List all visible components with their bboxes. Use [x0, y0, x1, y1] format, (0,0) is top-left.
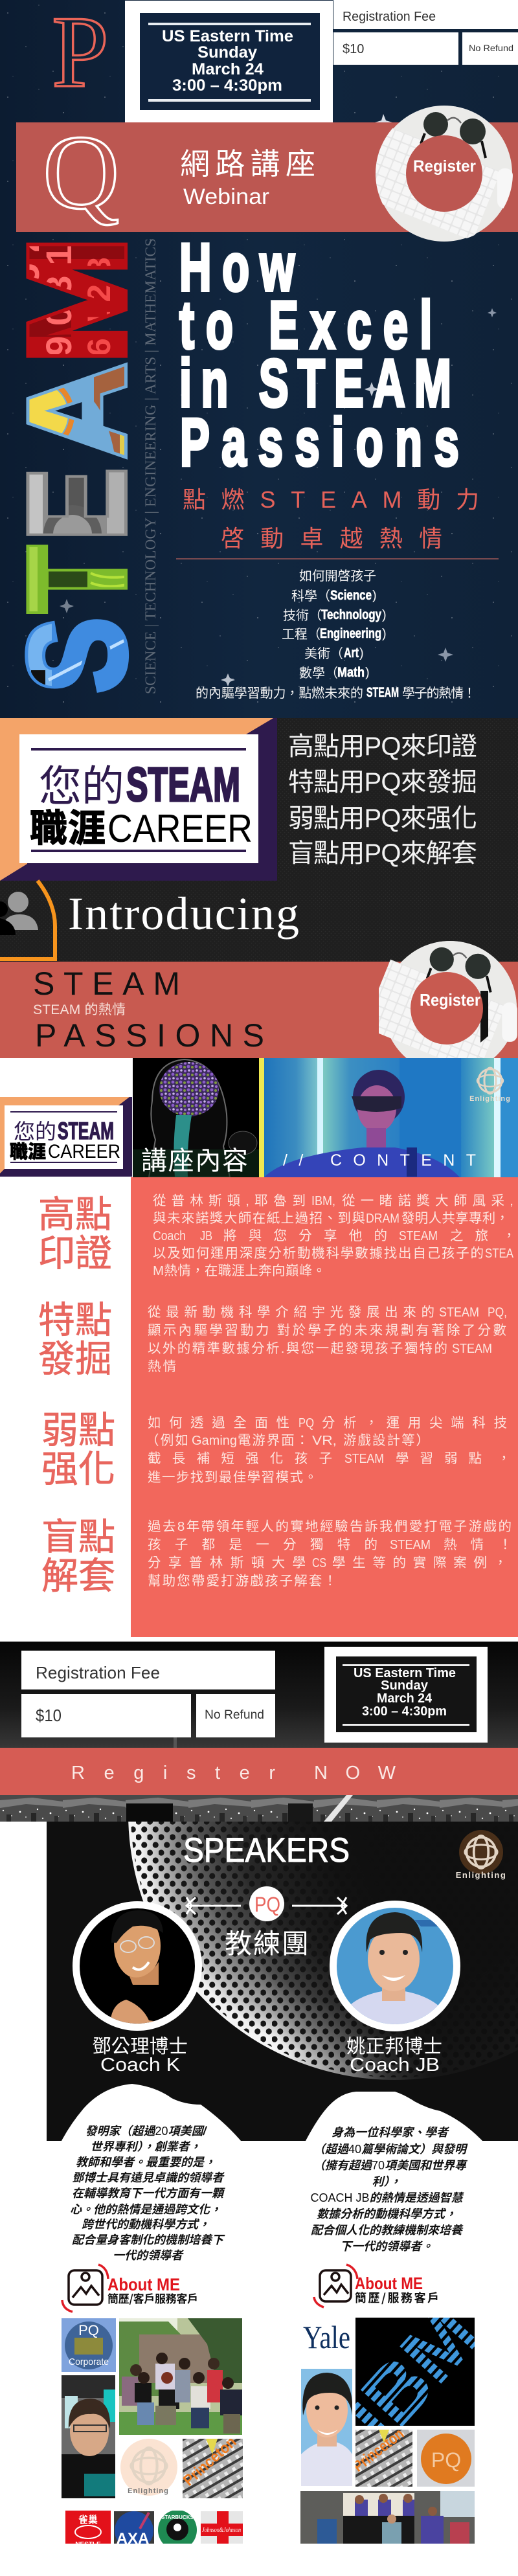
- letter T with circuit board: [26, 545, 128, 614]
- graphic: vertical STEAM letters: [25, 242, 130, 693]
- badge: your STEAM career: 職涯: [30, 798, 106, 852]
- text block: STEAM list: STEAM: [366, 685, 399, 700]
- text: unique point paragraph: 以外的精準數據分析.與您一起發現孩子獨特的: [148, 1341, 447, 1356]
- text block: STEAM list: Math: [337, 665, 365, 680]
- panel: event time box: US Eastern Time: [162, 27, 293, 45]
- text: unique point paragraph: 顯示內驅學習動力 對於學子的未來規劃有著除了分數: [148, 1323, 506, 1338]
- shape: left bio blob: [62, 2084, 241, 2141]
- text: high point paragraph: 耶魯到: [254, 1193, 306, 1208]
- panel: registration fee table 2: Registration Fee: [36, 1663, 160, 1682]
- heading: coach team: 教練團: [225, 1922, 309, 1961]
- icon: PQ circle: [249, 1886, 284, 1921]
- button: register circle 2: [379, 941, 517, 1058]
- badge: your STEAM career: CAREER: [107, 807, 253, 850]
- image: PQ Corporate: PQ: [78, 2322, 99, 2338]
- panel: speakers: [47, 1822, 518, 2141]
- text: high point paragraph: 發明人共享專利，: [401, 1211, 509, 1226]
- heading: SPEAKERS: SPEAKERS: [183, 1831, 350, 1870]
- text: weak point paragraph: （例如: [146, 1433, 188, 1448]
- text: high point paragraph: 之旅: [450, 1228, 488, 1243]
- icon: Enlighting logo: [469, 1068, 511, 1103]
- text: vertical discipline line: SCIENCE | TECHNOLOGY | ENGINEERING | ARTS | MATHEMATICS: [142, 238, 159, 694]
- title: How to Excel in STEAM Passions: Passions: [180, 404, 471, 480]
- image: Princeton map 2: Princeton: [350, 2425, 407, 2476]
- text: high point paragraph: Coach: [153, 1228, 186, 1243]
- text block: STEAM list: Science: [330, 588, 372, 603]
- text block: STEAM list: ): [382, 627, 387, 641]
- text block: four PQ points: 高點用PQ來印證: [288, 732, 477, 761]
- image: PQ Corporate: Corporate: [69, 2356, 109, 2367]
- badge: small STEAM career: 您的: [14, 1114, 56, 1146]
- text: Coach JB bio: 數據分析的動機科學方式，: [317, 2208, 456, 2220]
- logo: Nestle: NESTLE: [75, 2541, 101, 2548]
- heading: Introducing: Introducing: [68, 888, 299, 940]
- photo: Coach JB: [330, 1901, 460, 2031]
- logo: AXA: [114, 2511, 154, 2544]
- panel: registration fee table 2: No Refund: [205, 1708, 264, 1722]
- badge: your STEAM career: STEAM: [126, 758, 240, 811]
- letter A with clock art: A: [0, 363, 154, 458]
- text: Coach K bio: 發明家（超過20項美國/: [85, 2125, 208, 2138]
- text: weak point paragraph: Gaming: [192, 1433, 237, 1448]
- heading: About ME left: About ME: [107, 2275, 180, 2294]
- text: weak point paragraph: VR,: [312, 1433, 337, 1448]
- text block: STEAM list: 科學（: [291, 585, 330, 604]
- text: Coach JB bio: 身為一位科學家、學者: [332, 2126, 449, 2139]
- panel: registration fee table 2: [21, 1651, 275, 1737]
- image: team meeting: [300, 2491, 475, 2544]
- text block: STEAM list: 數學（: [299, 662, 338, 681]
- text: unique point paragraph: 從最新動機科學介紹宇光發展出來的: [148, 1305, 434, 1320]
- divider line: [176, 558, 499, 559]
- text block: STEAM list: ): [372, 589, 377, 603]
- panel: STEAM passions band: PASSIONS: [35, 1017, 264, 1054]
- text: Coach K bio: [70, 2125, 225, 2262]
- text: Coach K name: Coach K: [100, 2055, 181, 2075]
- text: weak point paragraph: 學習弱點: [396, 1451, 482, 1466]
- image: Enlighting logo panel: [120, 2439, 177, 2496]
- text: Coach K bio: 心。他的熱情是通過跨文化，: [70, 2203, 221, 2216]
- letter A with clock art: [26, 362, 128, 460]
- panel: event time box 2: US Eastern Time: [354, 1666, 456, 1680]
- text block: STEAM list: [196, 565, 476, 701]
- heading: weak point: 弱點: [41, 1401, 115, 1454]
- text: Coach K name: [92, 2031, 188, 2075]
- heading: About ME right: About ME: [355, 2274, 423, 2293]
- image: man with glasses: [62, 2375, 115, 2498]
- heading: About ME right: 簡歷/服務客戶: [355, 2289, 439, 2306]
- text: blind point paragraph: 學生等的實際案例，: [332, 1555, 507, 1570]
- text block: STEAM list: Technology: [321, 607, 381, 622]
- image: IBM logo: [355, 2318, 475, 2426]
- heading: CONTENT: // CONTENT: [283, 1151, 476, 1169]
- title: How to Excel in STEAM Passions: in STEAM: [179, 345, 460, 421]
- text block: four PQ points: 盲點用PQ來解套: [288, 839, 477, 868]
- heading: unique point: 特點: [38, 1291, 112, 1344]
- text: Coach JB name: [346, 2031, 442, 2075]
- panel: event time box 2: Sunday: [381, 1678, 429, 1693]
- text: blind point paragraph: [148, 1519, 512, 1588]
- subtitle: ignite passion: 啓動卓越熱情: [221, 525, 442, 552]
- badge: small STEAM career: CAREER: [48, 1141, 120, 1162]
- heading: high point: [38, 1185, 112, 1277]
- letter M with red numbers: 5 2 3: [4, 199, 47, 285]
- heading: blind point: 解套: [41, 1546, 115, 1599]
- text: unique point paragraph: PQ,: [488, 1305, 507, 1320]
- logo: Nestle: 雀巢: [78, 2513, 98, 2526]
- band: Register NOW: [0, 1748, 518, 1795]
- panel: registration fee table: $10: [343, 42, 364, 56]
- heading: blind point: [41, 1508, 115, 1599]
- text block: STEAM list: Engineering: [320, 626, 381, 641]
- text: weak point paragraph: STEAM: [344, 1451, 384, 1466]
- text: blind point paragraph: 分享普林斯頓大學: [148, 1555, 306, 1570]
- text block: STEAM list: 如何開啓孩子: [299, 565, 376, 584]
- text: Coach JB name: 姚正邦博士: [346, 2031, 442, 2059]
- text: weak point paragraph: 電游界面：: [238, 1433, 309, 1448]
- text: Coach JB bio: COACH JB的熱情是透過智慧: [310, 2191, 465, 2204]
- badge: your STEAM career: [0, 718, 277, 881]
- text: high point paragraph: ，: [502, 1228, 515, 1243]
- title: How to Excel in STEAM Passions: to Excel: [179, 287, 444, 363]
- text: Coach JB bio: 配合個人化的教練機制來培養: [311, 2224, 464, 2237]
- image: PQ orange: [417, 2430, 475, 2487]
- letter S with blue lab glass: S: [1, 617, 154, 693]
- text block: four PQ points: 特點用PQ來發掘: [288, 768, 477, 797]
- logo: Starbucks: [158, 2511, 197, 2544]
- icon: Enlighting logo: [456, 1830, 506, 1880]
- text: weak point paragraph: 進一步找到最佳學習模式。: [148, 1470, 317, 1485]
- text: high point paragraph: STEAM: [399, 1228, 438, 1243]
- text: Coach JB bio: （擁有超過70項美國和世界專: [313, 2159, 468, 2172]
- text: unique point paragraph: STEAM: [452, 1341, 492, 1356]
- title: How to Excel in STEAM Passions: How: [179, 229, 305, 305]
- text: Coach JB bio: 利），: [372, 2175, 401, 2188]
- text: weak point paragraph: 分析，運用尖端科技: [322, 1416, 507, 1430]
- divider: yellow strip: [259, 1058, 264, 1177]
- logo: Johnson and Johnson: Johnson&Johnson: [202, 2526, 241, 2534]
- logo: Yale: Yale: [303, 2319, 350, 2355]
- heading: Q drop letter: Q: [43, 114, 119, 231]
- button: register circle 2: Register: [420, 990, 480, 1010]
- text: unique point paragraph: STEAM: [439, 1305, 479, 1320]
- text: blind point paragraph: 過去8年帶領年輕人的實地經驗告訴我們愛打電子游戲的: [148, 1519, 512, 1534]
- heading: weak point: 强化: [41, 1440, 115, 1493]
- logo: AXA: AXA: [117, 2530, 149, 2548]
- heading: About ME right: [355, 2274, 439, 2306]
- text: Coach JB bio: （超過40篇學術論文）與發明: [313, 2143, 468, 2156]
- heading: high point: 高點: [38, 1185, 112, 1238]
- icon: PQ circle: PQ: [254, 1893, 280, 1916]
- panel: webinar band: [16, 114, 518, 232]
- text: webinar Chinese: 網路講座: [180, 141, 315, 183]
- panel: dark career section: [0, 718, 518, 962]
- icon: photo frame left: [62, 2265, 108, 2312]
- heading: unique point: 發掘: [38, 1329, 112, 1383]
- button: register circle: [376, 106, 513, 242]
- text: blind point paragraph: 熱情: [444, 1537, 484, 1552]
- image: Coach JB portrait: [301, 2369, 352, 2486]
- panel: event time box 2: 3:00 – 4:30pm: [362, 1704, 447, 1719]
- panel: event time box: March 24: [192, 60, 264, 78]
- text: unique point paragraph: [148, 1305, 507, 1374]
- letter M with red numbers: 6 1 2 3: [81, 257, 117, 356]
- text block: STEAM list: ): [365, 666, 370, 680]
- panel: event time box 2: [324, 1647, 488, 1743]
- text: high point paragraph: DRAM: [366, 1211, 400, 1226]
- text: high point paragraph: 從一睹諾獎大師風采,: [342, 1193, 513, 1208]
- subtitle: ignite STEAM: 點燃STEAM動力: [183, 486, 479, 513]
- panel: event time box: 3:00 – 4:30pm: [172, 76, 282, 95]
- image: Princeton map 2: [355, 2430, 412, 2487]
- text: high point paragraph: 將與您分享他的: [223, 1228, 387, 1243]
- icon: Enlighting logo: Enlighting: [469, 1095, 511, 1103]
- image: Princeton map: Princeton: [180, 2433, 240, 2489]
- text: weak point paragraph: 如何透過全面性: [148, 1416, 289, 1430]
- letter T with circuit board: T: [0, 546, 153, 613]
- text: Coach K bio: 世界專利），創業者，: [91, 2140, 201, 2153]
- letter M with red numbers: 9 0 3 1: [38, 245, 79, 356]
- text: blind point paragraph: ！: [499, 1537, 512, 1552]
- text block: STEAM list: 技術（: [283, 605, 322, 624]
- panel: registration fee table: No Refund: [469, 43, 513, 53]
- heading: lecture content: 講座內容: [141, 1140, 248, 1177]
- icon: orange bracket with people: [0, 881, 55, 959]
- icon: Enlighting logo: Enlighting: [456, 1870, 506, 1880]
- heading: weak point: [41, 1401, 115, 1493]
- letter M with red numbers: M: [0, 236, 153, 365]
- text: Coach K bio: 配合量身客制化的機制培養下: [72, 2233, 225, 2246]
- image: PQ Corporate: [62, 2318, 116, 2372]
- text: high point paragraph: 以及如何運用深度分析動機科學數據找出自己孩子的: [153, 1246, 484, 1261]
- heading: About ME left: 簡歷/客戶服務客戶: [107, 2290, 198, 2306]
- text: high point paragraph: M熱情，在職涯上奔向巔峰。: [153, 1263, 326, 1278]
- panel: content coral background: [131, 1177, 518, 1637]
- text block: STEAM list: 的內驅學習動力，點燃未來的: [196, 683, 363, 701]
- panel: event time box: [125, 1, 333, 123]
- text block: STEAM list: 學子的熱情！: [402, 683, 476, 701]
- text: high point paragraph: JB: [200, 1228, 212, 1243]
- image: Enlighting logo panel: Enlighting: [128, 2487, 169, 2495]
- band: Register NOW: NOW: [314, 1763, 396, 1783]
- text: Coach K bio: 一代的領導者: [113, 2249, 184, 2262]
- text: high point paragraph: [153, 1193, 515, 1278]
- text block: STEAM list: ): [359, 646, 364, 661]
- panel: registration fee table: [333, 0, 518, 65]
- image: Princeton map: [183, 2439, 243, 2498]
- panel: starry hero background: [0, 0, 518, 718]
- badge: small STEAM career: 職涯: [10, 1138, 46, 1164]
- logo: Johnson and Johnson: [201, 2511, 243, 2544]
- panel: STEAM passions band: STEAM 的熱情: [33, 1002, 126, 1017]
- logo: Nestle: [65, 2511, 111, 2544]
- shape: right bio blob: [306, 2092, 482, 2141]
- text: unique point paragraph: 熱情: [148, 1359, 176, 1374]
- title: How to Excel in STEAM Passions: [179, 229, 471, 480]
- text: webinar English: Webinar: [183, 185, 269, 209]
- heading: unique point: [38, 1291, 112, 1383]
- text: high point paragraph: 從普林斯頓,: [153, 1193, 249, 1208]
- text: Coach K bio: 教師和學者。最重要的是，: [76, 2156, 216, 2169]
- image: PQ orange: PQ: [431, 2448, 461, 2472]
- text: Coach JB name: Coach JB: [350, 2055, 440, 2075]
- text: Coach K bio: 在輔導教育下一代方面有一顆: [72, 2187, 225, 2200]
- panel: event time box 2: March 24: [377, 1691, 433, 1706]
- letter E with metal gears: E: [0, 468, 153, 541]
- panel: event time box: Sunday: [197, 43, 257, 62]
- text: Coach JB bio: [310, 2126, 468, 2253]
- arrow: right: [292, 1897, 346, 1914]
- photo: Coach K: [73, 1901, 202, 2031]
- text block: STEAM list: 工程（: [282, 624, 321, 642]
- text: blind point paragraph: 孩子都是一分獨特的: [148, 1537, 377, 1552]
- text block: STEAM list: 美術（: [304, 643, 343, 662]
- text block: four PQ points: [288, 732, 477, 868]
- image: glass head brain: [133, 1058, 259, 1177]
- letter E with metal gears: [26, 469, 128, 536]
- text: high point paragraph: IBM,: [311, 1193, 335, 1208]
- panel: registration fee table 2: $10: [36, 1706, 62, 1725]
- icon: photo frame right: [314, 2265, 357, 2307]
- graphic: speaker sphere grille: [128, 1822, 429, 2080]
- button: register circle: Register: [413, 157, 476, 175]
- text: Coach K bio: 鄧博士具有遠見卓識的領導者: [72, 2171, 225, 2184]
- text: weak point paragraph: [146, 1416, 510, 1485]
- text: high point paragraph: 與未來諾獎大師在紙上過招、到與: [153, 1211, 365, 1226]
- panel: registration fee table: Registration Fee: [343, 10, 436, 24]
- text: blind point paragraph: 幫助您帶愛打游戲孩子解套！: [148, 1574, 337, 1588]
- letter S with blue lab glass: [25, 619, 130, 693]
- badge: small STEAM career: STEAM: [58, 1118, 114, 1144]
- image: VR person: [264, 1058, 518, 1177]
- panel: STEAM passions band: [0, 962, 518, 1058]
- image: client logos: [65, 2511, 243, 2544]
- text: weak point paragraph: PQ: [298, 1416, 314, 1430]
- text: blind point paragraph: STEAM: [390, 1537, 431, 1552]
- heading: blind point: 盲點: [41, 1508, 115, 1561]
- text block: STEAM list: Art: [344, 646, 359, 661]
- panel: STEAM passions band: STEAM: [33, 966, 180, 1002]
- image: group photo Princeton: [119, 2318, 242, 2435]
- arrow: left: [186, 1897, 241, 1914]
- band: Register NOW: Register: [71, 1763, 275, 1783]
- text: blind point paragraph: CS: [312, 1555, 326, 1570]
- badge: small STEAM career: [0, 1097, 132, 1177]
- text block: four PQ points: 弱點用PQ來强化: [288, 804, 477, 833]
- heading: high point: 印證: [38, 1224, 112, 1277]
- text: weak point paragraph: ，: [497, 1451, 510, 1466]
- text: weak point paragraph: 游戲設計等）: [343, 1433, 429, 1448]
- text: weak point paragraph: 截長補短强化孩子: [148, 1451, 332, 1466]
- letter M with red numbers: [26, 242, 128, 358]
- text: Coach K bio: 跨世代的動機科學方式，: [82, 2218, 210, 2231]
- text: Coach K name: 鄧公理博士: [92, 2031, 188, 2059]
- text block: STEAM list: ): [382, 608, 387, 622]
- text: Coach JB bio: 下一代的領導者。: [340, 2240, 433, 2253]
- badge: your STEAM career: 您的: [39, 752, 124, 814]
- panel: register city backdrop: [0, 1642, 518, 1822]
- logo: Starbucks: STARBUCKS: [161, 2514, 194, 2520]
- heading: About ME left: [107, 2275, 198, 2306]
